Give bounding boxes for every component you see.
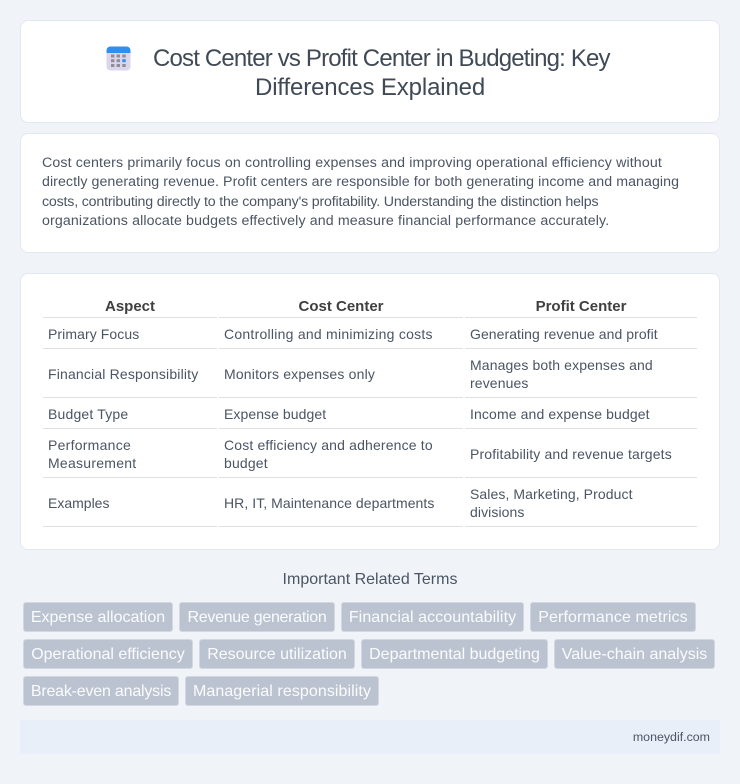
table header: Profit Center [536, 298, 626, 315]
row: examples: Sales, Marketing, Product [470, 486, 633, 502]
row: financial responsibility: Monitors expenses only [224, 366, 375, 382]
tag: resource utilization: Resource utilization [207, 646, 347, 663]
footer bar [20, 720, 720, 754]
row: examples: divisions [470, 504, 524, 520]
header panel [20, 20, 720, 123]
row: financial responsibility: revenues [470, 375, 529, 391]
tag: departmental budgeting [361, 639, 548, 669]
row: performance measurement [48, 437, 672, 471]
intro text [42, 155, 679, 229]
tag: revenue generation: Revenue generation [187, 609, 327, 626]
row: examples: Examples [48, 495, 109, 511]
row: financial responsibility [48, 357, 653, 391]
tag: operational efficiency: Operational efficiency [31, 646, 185, 663]
row: performance measurement: Performance [48, 437, 131, 453]
tag: resource utilization [199, 639, 355, 669]
title: Cost Center vs Profit Center in Budgeting: Key [153, 45, 610, 72]
intro text: organizations allocate budgets effectively and measure financial performance accurately. [42, 213, 609, 229]
icon: calendar [106, 46, 130, 70]
row: examples [48, 486, 633, 520]
intro text: costs, contributing directly to the company's profitability. Understanding the distinction helps [42, 194, 598, 210]
table rules [43, 317, 697, 527]
related terms tags [23, 602, 715, 706]
tag: value-chain analysis [554, 639, 715, 669]
tag: expense allocation [23, 602, 173, 632]
row: primary focus: Primary Focus [48, 326, 139, 342]
tag: break-even analysis: Break-even analysis [31, 683, 171, 700]
row: budget type [48, 406, 650, 422]
row: performance measurement: budget [224, 455, 268, 471]
comparison table panel [20, 273, 720, 550]
row: budget type: Expense budget [224, 406, 326, 422]
row: financial responsibility: Manages both expenses and [470, 357, 653, 373]
row: performance measurement: Profitability and revenue targets [470, 446, 672, 462]
row: financial responsibility: Financial Responsibility [48, 366, 198, 382]
footer source: moneydif.com [633, 730, 710, 744]
related terms heading: Important Related Terms [283, 571, 457, 588]
tag: managerial responsibility [185, 676, 379, 706]
tag: operational efficiency [23, 639, 193, 669]
row: performance measurement: Cost efficiency and adherence to [224, 437, 433, 453]
tag: performance metrics: Performance metrics [538, 609, 688, 626]
intro text: directly generating revenue. Profit centers are responsible for both generating income and managing [42, 174, 679, 190]
row: primary focus: Controlling and minimizing costs [224, 326, 433, 342]
row: budget type: Budget Type [48, 406, 128, 422]
tag: value-chain analysis: Value-chain analysis [562, 646, 707, 663]
tag: financial accountability [341, 602, 524, 632]
tag: financial accountability: Financial accountability [349, 609, 516, 626]
intro text: Cost centers primarily focus on controlling expenses and improving operational efficiency without [42, 155, 662, 171]
tag: revenue generation [179, 602, 335, 632]
tag: break-even analysis [23, 676, 179, 706]
intro text panel [20, 133, 720, 253]
table header: Aspect [105, 298, 155, 315]
title: Differences Explained [255, 74, 485, 101]
tag: managerial responsibility: Managerial responsibility [193, 683, 371, 700]
row: budget type: Income and expense budget [470, 406, 650, 422]
row: primary focus: Generating revenue and profit [470, 326, 658, 342]
title [153, 45, 610, 101]
tag: departmental budgeting: Departmental budgeting [369, 646, 540, 663]
row: performance measurement: Measurement [48, 455, 136, 471]
table header [105, 298, 626, 315]
row: examples: HR, IT, Maintenance departments [224, 495, 434, 511]
tag: expense allocation: Expense allocation [31, 609, 165, 626]
table header: Cost Center [298, 298, 384, 315]
tag: performance metrics [530, 602, 696, 632]
row: primary focus [48, 326, 658, 342]
